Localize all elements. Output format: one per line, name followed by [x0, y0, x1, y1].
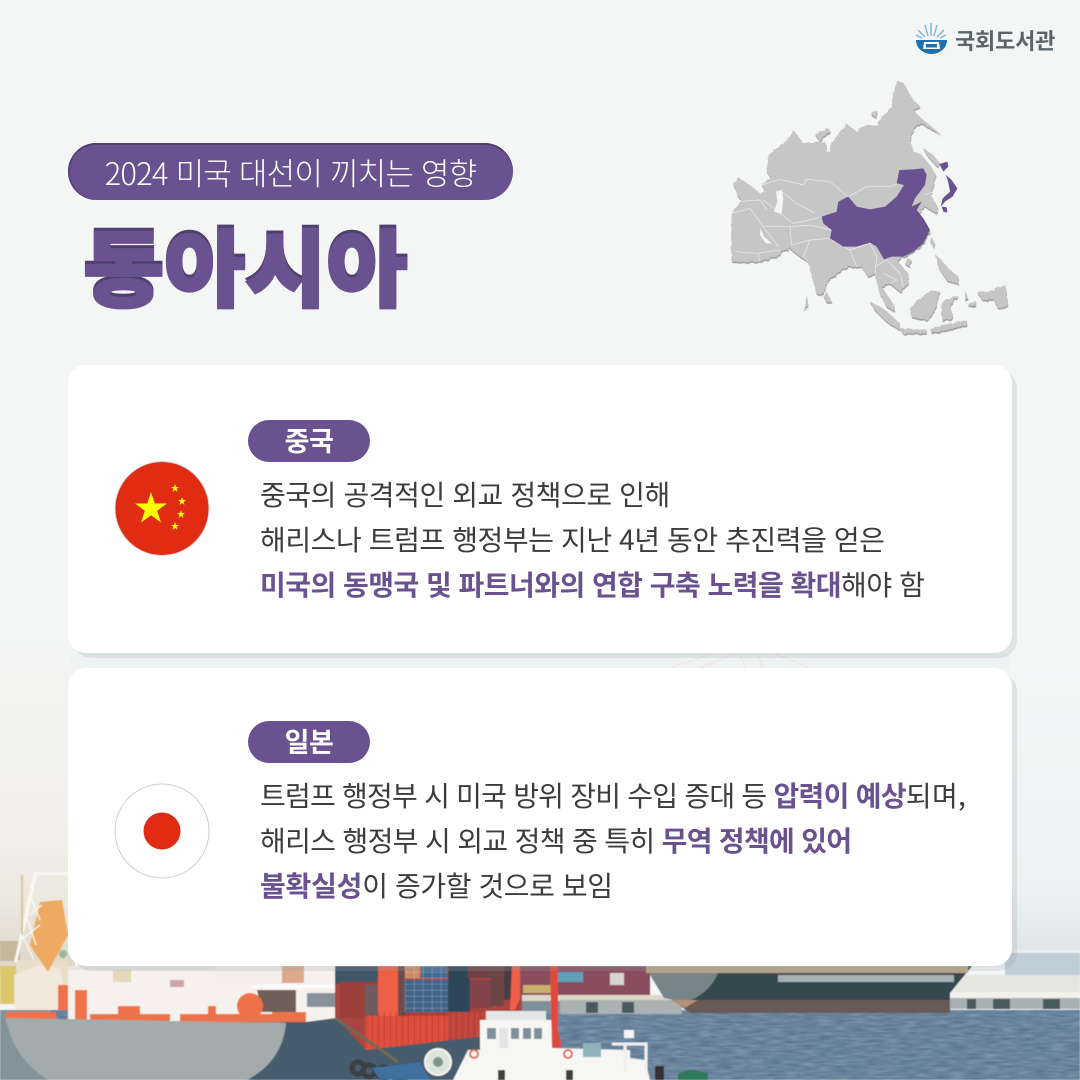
text block: China — [260, 474, 924, 604]
right quay — [948, 975, 1080, 993]
grey landmass — [732, 81, 1008, 333]
left crane and lifeboat — [0, 941, 20, 961]
tugboat — [453, 966, 708, 1080]
icon: open book with rays — [916, 23, 947, 54]
panel: Japan — [68, 668, 1012, 966]
icon: Japan flag — [114, 784, 210, 878]
dark hull of container ship — [250, 1018, 485, 1080]
tag: China: 중국 — [285, 420, 333, 459]
text block: China: 미국의 동맹국 및 파트너와의 연합 구축 노력을 확대해야 함 — [260, 564, 924, 604]
Caspian and Persian Gulf water — [774, 190, 783, 214]
white ship deck — [68, 966, 340, 1022]
map of Asia with China and Japan highlighted — [730, 80, 1008, 336]
text block: Japan: 해리스 행정부 시 외교 정책 중 특히 무역 정책에 있어 — [260, 820, 851, 860]
title: 동아시아 — [83, 204, 408, 325]
distant water on the right — [1005, 952, 1080, 978]
country borders — [732, 179, 933, 287]
faint crane lines between panels — [670, 654, 810, 668]
tag: Japan — [248, 721, 370, 763]
logo text: 국회도서관 — [955, 24, 1055, 56]
orange deck equipment — [6, 985, 306, 1022]
Japan — [939, 162, 957, 213]
panel: China — [68, 365, 1012, 653]
tag: China — [248, 420, 370, 462]
text block: Japan: 불확실성이 증가할 것으로 보임 — [260, 865, 613, 905]
text block: China: 중국의 공격적인 외교 정책으로 인해 — [260, 474, 670, 514]
distant cargo ship — [646, 966, 972, 1013]
logo: National Assembly Library — [916, 23, 1055, 56]
text block: China: 해리스나 트럼프 행정부는 지난 4년 동안 추진력을 얻은 — [260, 519, 885, 559]
text block: Japan: 트럼프 행정부 시 미국 방위 장비 수입 증대 등 압력이 예상되며, — [260, 775, 966, 815]
tag: Japan: 일본 — [285, 721, 333, 760]
tyres and winch on tugboat — [352, 1062, 406, 1080]
background magenta containers and quay — [520, 966, 650, 1000]
China — [822, 168, 930, 259]
red and blue containers — [335, 966, 540, 1056]
icon: China flag — [114, 461, 210, 556]
grey stern of ship — [6, 1018, 286, 1080]
harbor water — [0, 1010, 1080, 1080]
text block: Japan — [260, 775, 966, 905]
subtitle pill: 2024 미국 대선이 끼치는 영향 — [105, 149, 476, 194]
subtitle pill — [68, 143, 513, 200]
